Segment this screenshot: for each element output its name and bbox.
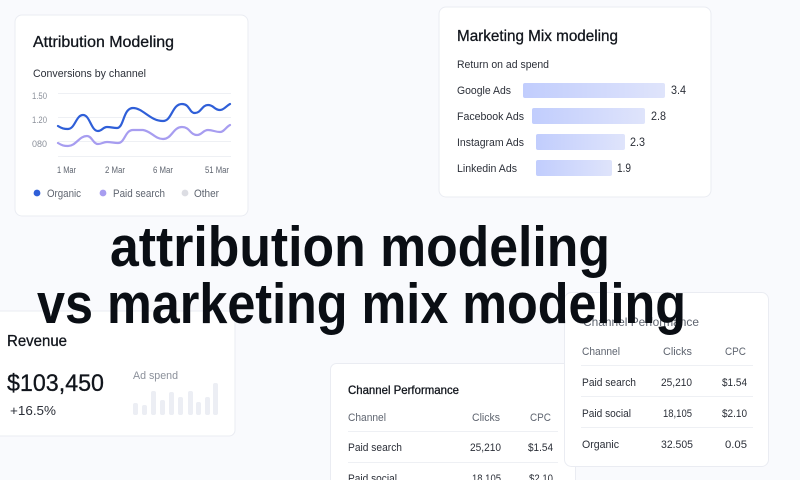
table: channel performance: $1.54 — [528, 442, 553, 454]
legend — [34, 188, 219, 200]
table: channel performance: Paid social — [582, 408, 631, 420]
table: channel performance: CPC — [725, 346, 746, 358]
table: channel performance: Clicks — [472, 412, 500, 424]
line chart: conversions by channel: 1 Mar — [57, 165, 76, 175]
table: channel performance: $1.54 — [722, 377, 747, 389]
line chart: conversions by channel: 6 Mar — [153, 165, 173, 175]
table: channel performance — [581, 346, 753, 451]
panel: channel performance (front) — [564, 292, 768, 466]
line chart: conversions by channel: 2 Mar — [105, 165, 125, 175]
table: channel performance: Channel — [348, 412, 386, 424]
legend: Organic — [47, 188, 81, 200]
line chart: conversions by channel: 51 Mar — [205, 165, 229, 175]
metric: revenue value: $103,450 — [7, 370, 104, 397]
bar chart: return on ad spend: 2.3 — [630, 135, 645, 149]
legend: Paid search — [113, 188, 165, 200]
title — [37, 215, 686, 336]
table: channel performance: 25,210 — [661, 377, 692, 389]
table: channel performance: Paid search — [582, 377, 636, 389]
metric: revenue change: +16.5% — [10, 403, 56, 418]
line chart: conversions by channel — [32, 91, 231, 175]
table: channel performance — [348, 412, 558, 480]
label: ad spend: Ad spend — [133, 370, 178, 382]
heading: revenue: Revenue — [7, 333, 67, 350]
heading: channel performance: Channel Performance — [348, 383, 459, 397]
table: channel performance: CPC — [530, 412, 551, 424]
line chart: conversions by channel: 080 — [32, 139, 47, 150]
panel: attribution modeling — [15, 15, 248, 216]
bar chart: return on ad spend: Linkedin Ads — [457, 163, 517, 175]
table: channel performance: Paid search — [348, 442, 402, 454]
bar chart: return on ad spend — [457, 83, 686, 176]
line chart: conversions by channel: 1.20 — [32, 115, 47, 126]
table: channel performance: 25,210 — [470, 442, 501, 454]
bar chart: return on ad spend: 1.9 — [617, 161, 631, 175]
panel: channel performance (back) — [330, 364, 576, 480]
sparkbars: ad spend — [133, 383, 218, 415]
table: channel performance: $2.10 — [722, 408, 747, 420]
bar chart: return on ad spend: 2.8 — [651, 109, 666, 123]
table: channel performance: Organic — [582, 439, 619, 451]
table: channel performance: Clicks — [663, 346, 692, 358]
heading: channel performance: Channel Performance — [583, 315, 699, 329]
legend: Other — [194, 188, 219, 200]
subtitle: conversions by channel: Conversions by channel — [33, 68, 146, 80]
title: vs marketing mix modeling — [37, 272, 686, 336]
table: channel performance: 32.505 — [661, 439, 693, 451]
title: attribution modeling — [110, 215, 610, 279]
table: channel performance: 18,105 — [663, 408, 692, 420]
bar chart: return on ad spend: Google Ads — [457, 85, 511, 97]
bar chart: return on ad spend: Facebook Ads — [457, 111, 524, 123]
table: channel performance: Channel — [582, 346, 620, 358]
bar chart: return on ad spend: 3.4 — [671, 83, 686, 97]
heading: marketing mix modeling: Marketing Mix modeling — [457, 28, 618, 45]
heading: attribution modeling: Attribution Modeling — [33, 34, 174, 51]
panel: revenue — [0, 311, 235, 436]
bar chart: return on ad spend: Instagram Ads — [457, 137, 524, 149]
table: channel performance: 0.05 — [725, 439, 747, 451]
subtitle: return on ad spend: Return on ad spend — [457, 59, 549, 71]
panel: marketing mix modeling — [439, 7, 711, 197]
line chart: conversions by channel: 1.50 — [32, 91, 47, 102]
